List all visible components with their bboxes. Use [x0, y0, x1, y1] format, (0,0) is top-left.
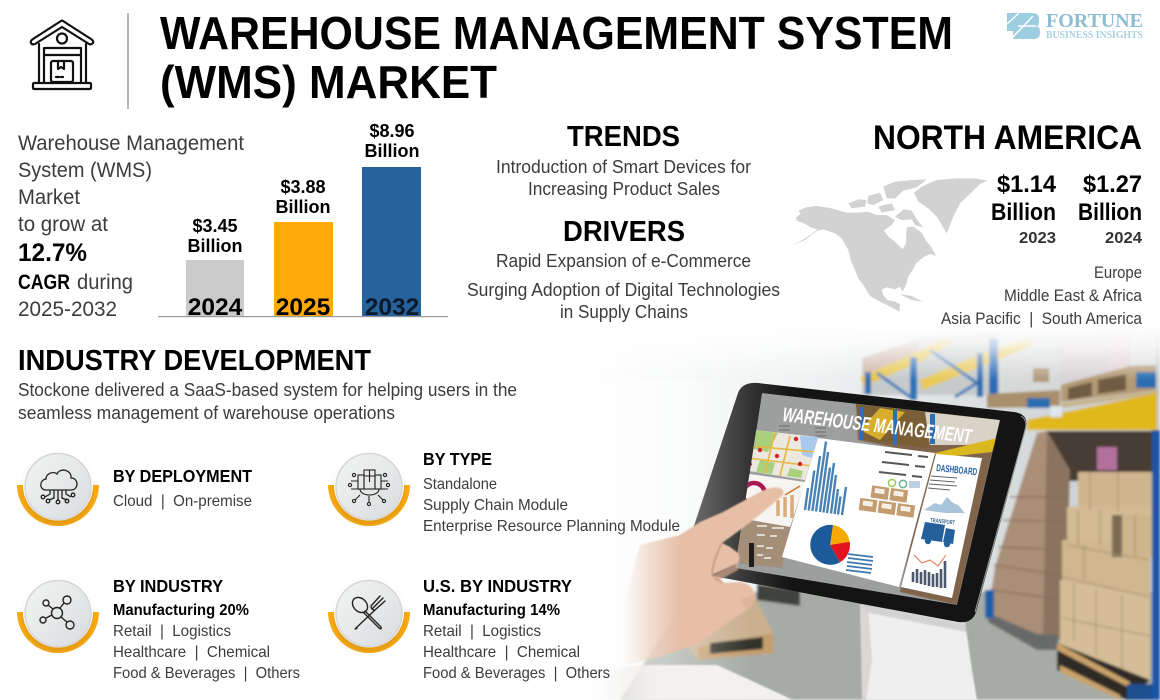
- by industry: Manufacturing 20%: [113, 602, 249, 619]
- tablet edge highlight: [975, 416, 1026, 612]
- year labels: 2024: [188, 294, 243, 321]
- value labels: $3.45: [192, 216, 238, 236]
- title: (WMS) MARKET: [160, 56, 497, 108]
- dark upper stack: [1047, 431, 1153, 481]
- photo fades: [580, 325, 1160, 700]
- drivers: Surging Adoption of Digital Technologies: [467, 280, 780, 300]
- value labels: $3.88: [280, 177, 326, 197]
- north america values: Billion: [991, 199, 1056, 226]
- by type: BY TYPE: [423, 449, 492, 469]
- by industry: [113, 576, 300, 682]
- title: WAREHOUSE MANAGEMENT SYSTEM: [160, 7, 953, 59]
- screen text: warehouse management: WAREHOUSE MANAGEMENT: [781, 404, 974, 448]
- gauges and thumbnail: [888, 479, 920, 488]
- map panel: [743, 430, 818, 480]
- icon: warehouse: [31, 20, 93, 89]
- trends: Introduction of Smart Devices for: [496, 157, 751, 177]
- screen text: transport: TRANSPORT: [930, 518, 955, 527]
- u.s. by industry: Retail | Logistics: [423, 623, 541, 640]
- by type: Supply Chain Module: [423, 497, 568, 514]
- market growth text: 2025-2032: [18, 297, 117, 321]
- drivers: Rapid Expansion of e-Commerce: [496, 251, 751, 271]
- north america values: 2024: [1105, 230, 1142, 247]
- by industry: BY INDUSTRY: [113, 576, 223, 596]
- header divider: [127, 13, 129, 109]
- u.s. by industry: Food & Beverages | Others: [423, 665, 610, 682]
- value labels: $8.96: [369, 121, 415, 141]
- photo: warehouse backdrop: [580, 325, 1160, 700]
- north america values: Billion: [1078, 199, 1142, 226]
- other regions: [941, 264, 1143, 328]
- icon: smart building: [328, 450, 410, 526]
- trends: [496, 121, 751, 199]
- u.s. by industry: U.S. BY INDUSTRY: [423, 576, 572, 596]
- donut panel: [745, 474, 805, 527]
- logo mark: [1007, 13, 1040, 39]
- floor: [620, 592, 1160, 700]
- north america values: $1.14: [997, 171, 1057, 198]
- title: [160, 7, 953, 108]
- by industry: Food & Beverages | Others: [113, 665, 300, 682]
- value labels: [188, 121, 420, 256]
- value labels: Billion: [364, 141, 420, 161]
- drivers: in Supply Chains: [560, 302, 688, 322]
- north america heading: NORTH AMERICA: [873, 119, 1142, 157]
- year labels: [188, 294, 419, 321]
- screen text lines: [928, 476, 957, 490]
- industry development: INDUSTRY DEVELOPMENT: [18, 345, 371, 377]
- year labels: 2025: [276, 294, 330, 321]
- industry development: [18, 345, 517, 423]
- by type: Enterprise Resource Planning Module: [423, 518, 680, 535]
- market growth text: to grow at: [18, 212, 108, 236]
- other regions: Europe: [1094, 264, 1142, 282]
- market growth text: Market: [18, 185, 80, 209]
- main white panel: [782, 438, 935, 587]
- u.s. by industry: Healthcare | Chemical: [423, 644, 580, 661]
- bar 2024: [186, 260, 244, 316]
- shelf goods: [1003, 357, 1060, 395]
- cardboard boxes: [858, 484, 917, 518]
- trends: TRENDS: [567, 121, 680, 153]
- hand pointing at tablet: [625, 487, 784, 665]
- by type: Standalone: [423, 476, 497, 493]
- map: North America: [794, 178, 987, 312]
- bar 2025: [274, 222, 333, 316]
- logo: Fortune Business Insights: BUSINESS INSIGHTS: [1046, 30, 1143, 41]
- market growth text: Warehouse Management: [18, 131, 244, 155]
- u.s. by industry: [423, 576, 610, 682]
- striped legend: [846, 554, 873, 573]
- market growth text: during: [77, 270, 133, 294]
- other regions: Middle East & Africa: [1004, 287, 1143, 305]
- drivers: DRIVERS: [563, 216, 685, 248]
- north america values: [991, 171, 1142, 247]
- market growth text: System (WMS): [18, 158, 152, 182]
- by deployment: Cloud | On-premise: [113, 493, 252, 510]
- by industry: Healthcare | Chemical: [113, 644, 270, 661]
- bar 2032: [362, 167, 421, 316]
- by deployment: BY DEPLOYMENT: [113, 466, 252, 486]
- tablet: [683, 383, 1026, 622]
- left sleeve: [620, 664, 792, 700]
- chart baseline: [158, 316, 448, 317]
- white sleeve holding tablet: [860, 604, 977, 700]
- year labels: 2032: [365, 294, 419, 321]
- screen text: dashboard: DASHBOARD: [936, 463, 978, 478]
- u.s. by industry: Manufacturing 14%: [423, 602, 560, 619]
- pie chart: [810, 525, 850, 565]
- cream boxes: [1078, 472, 1152, 512]
- yellow beam: [1027, 393, 1157, 430]
- tablet body: [683, 383, 1026, 622]
- industry development: seamless management of warehouse operations: [18, 403, 395, 423]
- by industry: Retail | Logistics: [113, 623, 231, 640]
- far rack: [861, 346, 1000, 396]
- logo: Fortune Business Insights: FORTUNE: [1046, 10, 1143, 32]
- background box and pallet: [690, 600, 773, 660]
- drivers: [467, 216, 780, 322]
- truck: [921, 522, 955, 547]
- small bar and line chart: [913, 555, 946, 588]
- icon: spoon and fork: [328, 578, 410, 653]
- mountains: [924, 497, 965, 513]
- market growth text: CAGR: [18, 270, 70, 294]
- north america values: $1.27: [1083, 171, 1142, 198]
- market growth text: [18, 131, 244, 321]
- dashboard panel: [901, 454, 982, 598]
- blue upright post: [1152, 430, 1160, 700]
- logo: Fortune Business Insights: [1007, 10, 1143, 41]
- stat lines: [879, 452, 928, 477]
- icon: cloud network: [17, 450, 99, 526]
- market growth text: 12.7%: [18, 239, 87, 267]
- trends: Increasing Product Sales: [528, 179, 720, 199]
- bar chart: [805, 442, 846, 515]
- tablet screen: [728, 393, 1000, 605]
- brown carton stack: [990, 430, 1049, 636]
- icon: network nodes: [17, 578, 99, 653]
- other regions: Asia Pacific | South America: [941, 310, 1143, 328]
- bar chart: market size: [158, 121, 448, 321]
- value labels: Billion: [188, 236, 242, 256]
- value labels: Billion: [276, 197, 330, 217]
- by type: [423, 449, 680, 535]
- by deployment: [113, 466, 252, 510]
- table panel: [737, 520, 790, 568]
- north america values: 2023: [1019, 230, 1056, 247]
- pallet: [1057, 643, 1150, 700]
- tiny screen text: [779, 426, 826, 436]
- industry development: Stockone delivered a SaaS-based system for helping users in the: [18, 380, 517, 400]
